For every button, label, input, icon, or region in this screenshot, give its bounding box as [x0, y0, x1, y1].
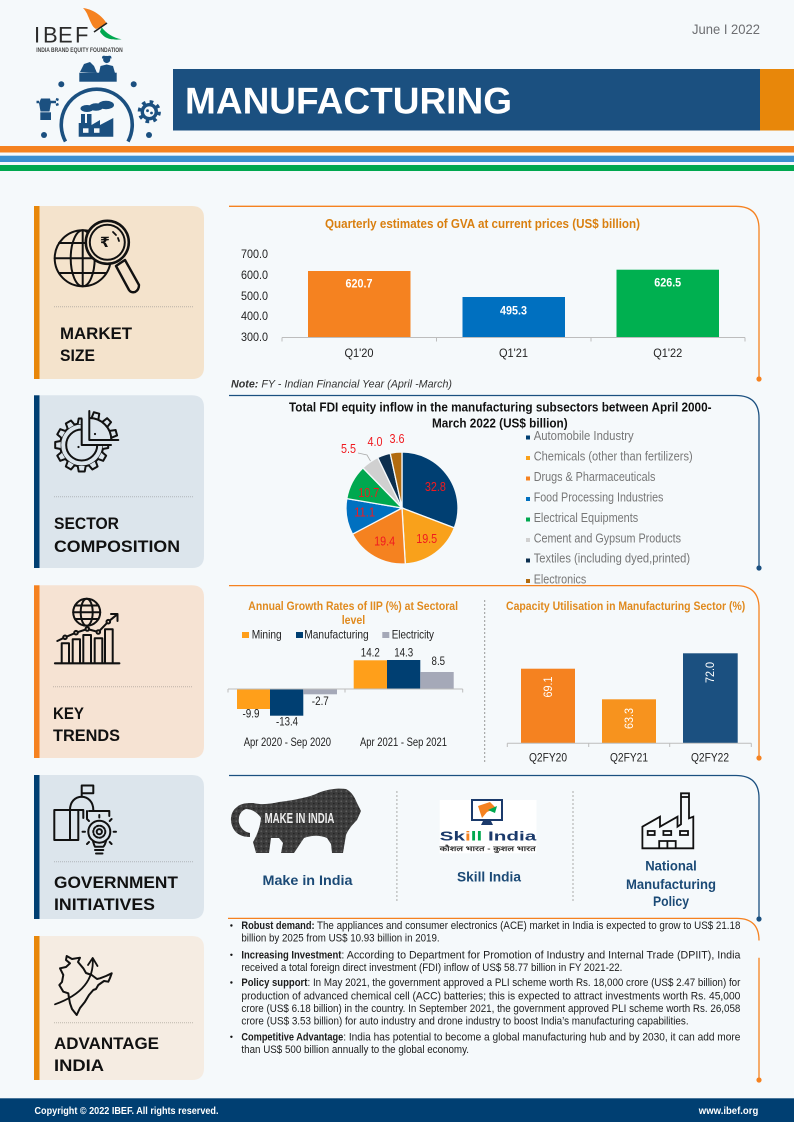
pie chart: FDI by subsector [346, 452, 458, 564]
bar chart: capacity utilisation: 63.3 [622, 708, 636, 729]
panel: advantage india content [228, 918, 762, 1083]
chart title: IIP growth: Annual Growth Rates of IIP (%) at Sectoral [248, 599, 458, 613]
chart title: Total FDI equity inflow in the manufacturing subsectors between April 2000- [289, 401, 712, 415]
bar chart: GVA: 626.5 [654, 278, 682, 290]
panel: market size chart [229, 206, 762, 390]
bullet: policy support: Policy support [241, 977, 308, 989]
bar chart: GVA: 300.0 [241, 330, 268, 344]
bullet: policy support: crore (US$ 6.18 billion) in the country. In September 2021, the government approved PLI scheme worth Rs. 26,058 [241, 1003, 740, 1015]
bar chart: capacity utilisation: 72.0 [703, 662, 717, 683]
bar chart: IIP growth [228, 645, 463, 749]
logo: make in india lion: MAKE IN INDIA [265, 810, 335, 827]
bar chart: GVA: Q1'21 [499, 346, 528, 360]
logo: skill india: कौशल भारत - कुशल भारत [438, 844, 537, 854]
page title: MANUFACTURING [185, 80, 512, 121]
bullet: policy support: : In May 2021, the government approved a PLI scheme worth Rs. 18,000 crore (US$ 2.47 billion) for [308, 977, 741, 989]
footer: www.ibef.org [698, 1105, 758, 1117]
pie labels: 5.5 [341, 441, 356, 456]
bar chart: capacity utilisation [507, 653, 751, 765]
panel: market size card [34, 206, 204, 379]
bar chart: GVA: 600.0 [241, 268, 268, 282]
label: national manufacturing policy: National [645, 858, 697, 874]
footer [0, 1098, 794, 1122]
label: national manufacturing policy: Policy [653, 893, 689, 909]
bar chart: IIP growth: 14.2 [361, 645, 380, 659]
bullet: increasing investment [230, 949, 740, 974]
bar chart: capacity utilisation: 69.1 [541, 676, 555, 698]
bar chart: IIP growth: -13.4 [276, 715, 298, 729]
legend: IIP: Mining [252, 627, 282, 641]
label [54, 514, 180, 556]
icon: factory [642, 793, 693, 848]
icon: globe and magnifier [55, 221, 139, 292]
pie legend [526, 429, 693, 587]
legend: IIP: Electricity [392, 627, 434, 641]
pie labels: 19.5 [416, 531, 437, 546]
label: INITIATIVES [54, 895, 155, 914]
bullet: policy support: production of advanced chemical cell (ACC) batteries; this is expected to attract investments worth Rs. 45,000 [241, 990, 740, 1002]
bar chart: GVA: Q1'22 [653, 346, 682, 360]
note: Note: FY - Indian Financial Year (April -March) [231, 378, 452, 390]
bar chart: GVA: Q1'20 [344, 346, 374, 360]
bullet: robust demand: billion by 2025 from US$ 10.93 billion in 2019. [241, 933, 440, 945]
header stripes [0, 146, 794, 171]
chart title: March 2022 (US$ billion) [432, 417, 568, 431]
pie labels: 11.1 [354, 505, 375, 520]
pie labels: 19.4 [374, 534, 395, 549]
pie legend: Cement and Gypsum Products [534, 532, 681, 546]
bar chart: GVA [241, 247, 745, 360]
logo: IBEF [34, 8, 123, 54]
bullet: robust demand: The appliances and consumer electronics (ACE) market in India is expected to grow to US$ 21.18 [317, 920, 740, 932]
chart title: Quarterly estimates of GVA at current prices (US$ billion) [325, 217, 640, 231]
footer: Copyright © 2022 IBEF. All rights reserved. [34, 1105, 219, 1117]
bullet: competitive advantage [230, 1031, 740, 1056]
bar chart: IIP growth: -2.7 [312, 694, 329, 708]
title banner [173, 69, 794, 130]
bullet: increasing investment: received a total foreign direct investment (FDI) inflow of US$ 58.77 billion in FY 2021-22. [241, 962, 622, 974]
label [54, 873, 179, 914]
label [60, 324, 133, 365]
icon: manufacturing emblem [36, 56, 159, 142]
logo: make in india lion [231, 789, 361, 853]
bar chart: capacity utilisation: Q2FY20 [529, 751, 567, 765]
bullet: robust demand: Robust demand: [241, 920, 315, 932]
pie legend: Chemicals (other than fertilizers) [534, 450, 693, 464]
label [54, 1034, 159, 1075]
bullet: competitive advantage: Competitive Advantage [241, 1031, 343, 1043]
pie labels: 4.0 [368, 434, 382, 449]
label: INDIA [54, 1056, 104, 1075]
bullet: robust demand [230, 920, 740, 945]
bar chart: IIP growth: Apr 2021 - Sep 2021 [360, 735, 447, 749]
panel: government initiatives card [34, 775, 204, 919]
bar chart: GVA: 700.0 [241, 247, 268, 261]
bar chart: GVA: 500.0 [241, 289, 268, 303]
legend: IIP: Manufacturing [304, 627, 369, 641]
label: KEY [53, 704, 85, 723]
bar chart: IIP growth: 14.3 [394, 645, 413, 659]
date: June I 2022 [692, 21, 760, 37]
logo: IBEF: IBEF [34, 23, 88, 48]
icon: india map with arrow [55, 956, 112, 1015]
bullet: policy support [230, 977, 741, 1027]
bullet: competitive advantage: than US$ 500 billion annually to the global economy. [241, 1044, 469, 1056]
bullet: increasing investment: : According to Department for Promotion of Industry and Internal Trade (DPIIT), India [341, 949, 740, 961]
panel: market size card: ₹ [100, 234, 110, 250]
label [53, 704, 120, 745]
panel: advantage india card [34, 936, 204, 1080]
pie labels: 10.7 [358, 485, 379, 500]
panel: key trends charts [228, 586, 762, 765]
bullet: policy support: crore (US$ 3.53 billion) for auto industry and drone industry to boost India’s manufacturing capabilities. [241, 1015, 689, 1027]
pie legend: Drugs & Pharmaceuticals [534, 470, 655, 484]
pie labels [341, 431, 446, 549]
bar chart: GVA: 495.3 [500, 306, 527, 318]
label: national manufacturing policy: Manufacturing [626, 876, 716, 892]
bar chart: IIP growth: -9.9 [242, 707, 260, 721]
panel: key trends card [34, 585, 204, 758]
panel: sector composition card [34, 395, 204, 568]
label: skill india: Skill India [457, 869, 521, 885]
pie legend: Textiles (including dyed,printed) [534, 552, 690, 566]
label: make in india: Make in India [262, 872, 353, 888]
label: GOVERNMENT [54, 873, 179, 892]
bullet: competitive advantage: : India has potential to become a global manufacturing hub and by 2030, it can add more [343, 1031, 740, 1043]
pie legend: Food Processing Industries [534, 491, 663, 505]
bullet: increasing investment: Increasing Investment [241, 949, 342, 961]
logo: IBEF: INDIA BRAND EQUITY FOUNDATION [36, 47, 123, 54]
pie legend: Automobile Industry [534, 429, 634, 443]
bar chart: capacity utilisation: Q2FY22 [691, 751, 729, 765]
label: SECTOR [54, 514, 119, 533]
icon: globe and rising bars [55, 599, 119, 663]
bar chart: IIP growth: Apr 2020 - Sep 2020 [244, 735, 331, 749]
bar chart: IIP growth: 8.5 [432, 654, 445, 668]
chart title: capacity utilisation: Capacity Utilisation in Manufacturing Sector (%) [506, 599, 745, 613]
icon: gear pie [55, 410, 122, 472]
bar chart: GVA: 400.0 [241, 309, 268, 323]
chart title: IIP growth [248, 599, 458, 627]
bar chart: GVA: 620.7 [346, 279, 372, 291]
pie labels: 32.8 [425, 479, 446, 494]
chart title: IIP growth: level [342, 613, 365, 627]
label: national manufacturing policy [626, 858, 716, 909]
label: MARKET [60, 324, 133, 343]
panel: government initiatives content [229, 776, 762, 922]
bar chart: capacity utilisation: Q2FY21 [610, 751, 648, 765]
icon: government building and bulb [54, 786, 116, 854]
label: TRENDS [53, 726, 120, 745]
panel: sector composition chart [229, 396, 762, 587]
label: SIZE [60, 346, 95, 365]
pie legend: Electronics [534, 573, 586, 587]
label: ADVANTAGE [54, 1034, 159, 1053]
chart title [289, 401, 712, 431]
pie legend: Electrical Equipments [534, 511, 638, 525]
logo: skill india [438, 800, 537, 854]
pie labels: 3.6 [390, 431, 404, 446]
label: COMPOSITION [54, 537, 180, 556]
logo: skill india: Sk ill India [440, 829, 537, 844]
legend: IIP [242, 627, 434, 641]
